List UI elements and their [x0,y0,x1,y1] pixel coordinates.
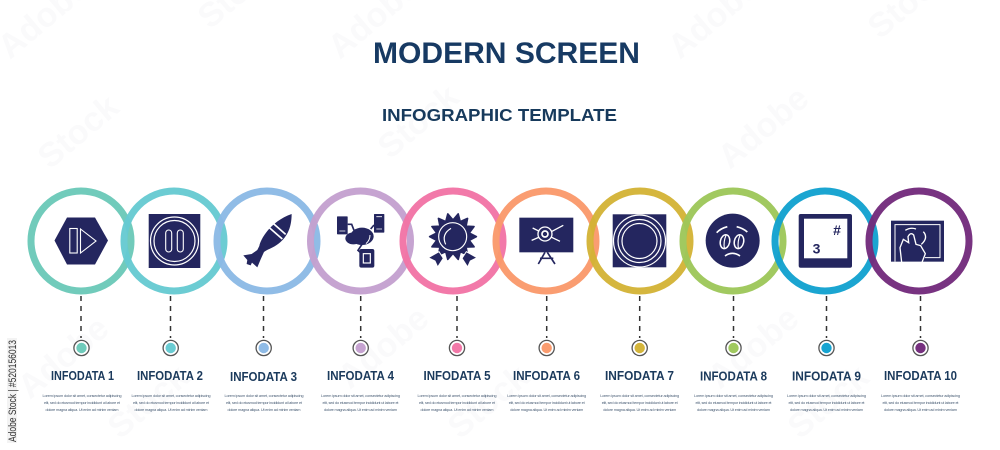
label block 7 [600,369,679,412]
label block 7: elit, sed do eiusmod tempor incididunt ut labore et [602,400,679,405]
label block 10: elit, sed do eiusmod tempor incididunt ut labore et [882,400,959,405]
watermark pattern: Stock [441,357,536,446]
label block 6 [507,369,586,412]
icon: touch screen [891,221,944,262]
label block 10: dolore magna aliqua. Ut enim ad minim veniam [884,407,957,412]
subtitle: INFOGRAPHIC TEMPLATE [382,105,617,125]
label block 10: Lorem ipsum dolor sit amet, consectetur adipiscing [881,393,960,398]
label block 9: dolore magna aliqua. Ut enim ad minim veniam [790,407,863,412]
label block 2 [132,369,210,412]
label block 9: INFODATA 9 [792,370,861,384]
ring 7 [590,191,690,291]
ring 8 [683,191,783,291]
connector 9 [819,296,834,356]
label block 9 [787,370,866,412]
label block 3: Lorem ipsum dolor sit amet, consectetur adipiscing [224,393,304,398]
label block 8: INFODATA 8 [700,370,767,384]
label block 3: dolore magna aliqua. Ut enim ad minim veniam [228,407,300,412]
label block 4 [321,369,400,412]
label block 9: elit, sed do eiusmod tempor incididunt ut labore et [788,400,865,405]
ring 3 [217,191,317,291]
label block 6: dolore magna aliqua. Ut enim ad minim veniam [510,407,583,412]
ring 6 [496,191,596,291]
label block 4: Lorem ipsum dolor sit amet, consectetur adipiscing [321,393,400,398]
label block 8 [694,370,773,412]
label block 10 [881,369,960,412]
watermark pattern: Adobe [701,299,806,396]
icon: mortar shell [243,214,292,267]
label block 7: dolore magna aliqua. Ut enim ad minim veniam [603,407,676,412]
watermark pattern: Adobe [331,299,436,396]
label block 2: elit, sed do eiusmod tempor incididunt ut labore et [133,400,210,405]
connector 3 [256,296,271,356]
watermark pattern: Stock [31,87,126,176]
ring 9 [775,191,875,291]
label block 5: dolore magna aliqua. Ut enim ad minim veniam [420,407,494,412]
watermark pattern: Stock [371,77,466,166]
icon: number keypad screen: 3 [813,240,821,256]
label block 3 [224,370,304,412]
ring 2 [124,191,224,291]
label block 3: INFODATA 3 [230,370,297,384]
label block 5 [418,369,496,412]
icon: number keypad screen: # [833,222,841,238]
ring 4 [310,191,410,291]
label block 7: Lorem ipsum dolor sit amet, consectetur adipiscing [600,393,679,398]
connector 6 [539,296,554,356]
watermark pattern: Stock [101,357,196,446]
ring 1 [31,191,131,291]
ring 5 [403,191,503,291]
label block 8: Lorem ipsum dolor sit amet, consectetur adipiscing [694,393,773,398]
ring 10 [869,191,969,291]
label block 1: INFODATA 1 [51,369,114,383]
label block 8: elit, sed do eiusmod tempor incididunt ut labore et [696,400,772,405]
label block 2: dolore magna aliqua. Ut enim ad minim veniam [134,407,208,412]
connector 2 [163,296,178,356]
label block 4: INFODATA 4 [327,369,394,383]
label block 1: dolore magna aliqua. Ut enim ad minim veniam [46,407,118,412]
label block 7: INFODATA 7 [605,369,674,383]
watermark pattern: Adobe [11,309,116,406]
label block 1: Lorem ipsum dolor sit amet, consectetur adipiscing [42,393,122,398]
connector 4 [353,296,368,356]
label block 9: Lorem ipsum dolor sit amet, consectetur adipiscing [787,393,866,398]
connector 7 [632,296,647,356]
label block 3: elit, sed do eiusmod tempor incididunt ut labore et [226,400,303,405]
label block 5: Lorem ipsum dolor sit amet, consectetur adipiscing [418,393,496,398]
label block 10: INFODATA 10 [884,369,957,383]
watermark pattern: Stock [781,357,876,446]
icon: sad face [706,214,760,268]
label block 1 [42,369,122,412]
side credit: Adobe Stock | #520156013 [7,340,19,442]
watermark pattern: Adobe [711,79,816,176]
label block 6: elit, sed do eiusmod tempor incididunt ut labore et [509,400,586,405]
label block 6: INFODATA 6 [513,369,580,383]
label block 4: elit, sed do eiusmod tempor incididunt ut labore et [322,400,399,405]
icon: pause button [149,214,200,268]
connector 5 [449,296,465,356]
label block 2: Lorem ipsum dolor sit amet, consectetur adipiscing [132,393,210,398]
label block 6: Lorem ipsum dolor sit amet, consectetur adipiscing [507,393,586,398]
title: MODERN SCREEN [373,37,640,70]
label block 4: dolore magna aliqua. Ut enim ad minim veniam [324,407,397,412]
label block 5: INFODATA 5 [424,369,491,383]
connector 8 [726,296,741,356]
icon: presentation board [519,218,573,264]
label block 8: dolore magna aliqua. Ut enim ad minim veniam [697,407,770,412]
icon: connected devices [337,214,384,268]
label block 1: elit, sed do eiusmod tempor incididunt ut labore et [44,400,121,405]
connector 1 [74,296,89,356]
connector 10 [913,296,928,356]
icon: number keypad screen [799,214,852,268]
icon: concentric circles [613,214,666,267]
icon: sun medal [428,214,477,267]
label block 2: INFODATA 2 [137,369,203,383]
icon: next hexagon [54,218,108,264]
label block 5: elit, sed do eiusmod tempor incididunt ut labore et [419,400,496,405]
